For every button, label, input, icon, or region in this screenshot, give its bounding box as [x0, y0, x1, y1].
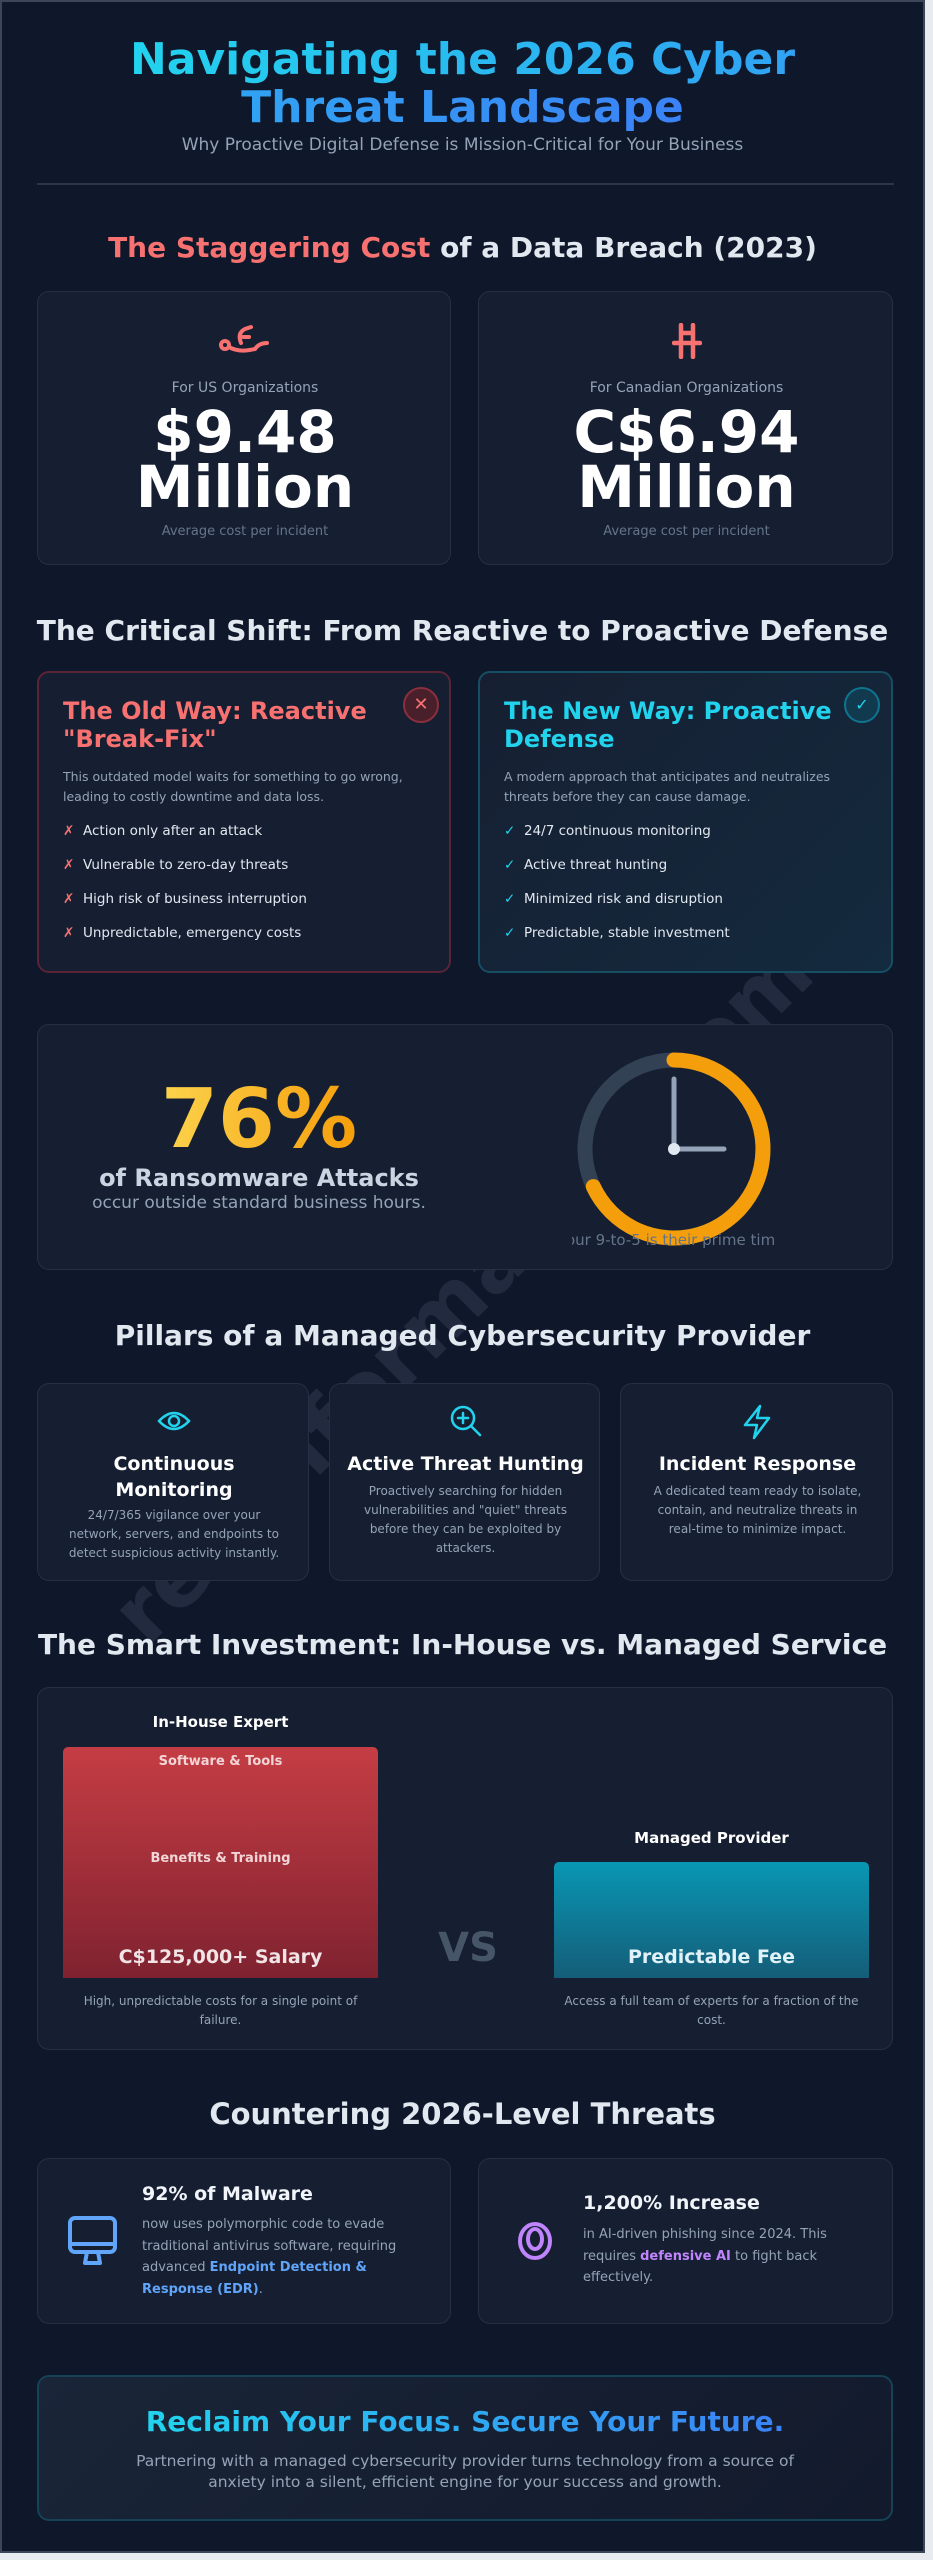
- panel: US cost: [37, 291, 451, 565]
- heading: old way: "Break-Fix": [63, 725, 217, 753]
- panel: malware: [37, 2158, 451, 2324]
- label: managed: Managed Provider: [634, 1829, 789, 1847]
- panel: Canada cost: Average cost per incident: [603, 524, 770, 539]
- heading: cost of breach: The Staggering Cost of a Data Breach (2023): [108, 231, 817, 264]
- icon: check circle: ✓: [855, 695, 869, 714]
- cta heading: Reclaim Your Focus. Secure Your Future.: [146, 2405, 784, 2438]
- list: old way: Unpredictable, emergency costs: [83, 925, 301, 941]
- panel: continuous monitoring: Monitoring: [115, 1479, 233, 1501]
- panel: continuous monitoring: Continuous: [113, 1453, 235, 1475]
- list: old way: [63, 823, 307, 941]
- heading: smart investment: The Smart Investment: In-House vs. Managed Service: [38, 1628, 887, 1661]
- panel: incident response: [620, 1383, 893, 1581]
- panel: old way: ✗: [63, 857, 74, 873]
- panel: incident response: Incident Response: [659, 1453, 856, 1475]
- panel: old way: ✗: [63, 891, 74, 907]
- list: new way: Minimized risk and disruption: [524, 891, 723, 907]
- icon: x circle: ✕: [413, 694, 429, 715]
- bar: in-house costs: Software & Tools: [159, 1754, 282, 1769]
- panel: old way: ✗: [63, 925, 74, 941]
- icon: search plus: [450, 1406, 482, 1436]
- panel: investment comparison: [37, 1687, 893, 2050]
- panel: AI phishing: [478, 2158, 893, 2324]
- stat: US: [136, 398, 354, 521]
- subtitle: Why Proactive Digital Defense is Mission-Critical for Your Business: [182, 135, 743, 155]
- heading: countering threats: Countering 2026-Level Threats: [209, 2097, 716, 2131]
- stat: Canada: Million: [577, 453, 796, 521]
- label: in-house: In-House Expert: [153, 1713, 288, 1731]
- bar: in-house costs: C$125,000+ Salary: [119, 1946, 322, 1968]
- bar: in-house costs: Benefits & Training: [150, 1851, 291, 1866]
- icon: US: [219, 325, 269, 353]
- panel: threat hunting: Proactively searching for hidden vulnerabilities and "quiet" threats before they can be exploited by attackers.: [364, 1484, 567, 1555]
- panel: old way: ✗: [63, 823, 74, 839]
- panel: new way: ✓: [504, 891, 515, 907]
- list: old way: High risk of business interruption: [83, 891, 307, 907]
- panel: US cost: For US Organizations: [172, 380, 318, 396]
- icon: check circle: [844, 687, 880, 723]
- title: Navigating the 2026 Cyber: [130, 34, 795, 85]
- bar: in-house costs: [63, 1747, 378, 1978]
- heading: critical shift: The Critical Shift: From Reactive to Proactive Defense: [37, 614, 888, 647]
- panel: continuous monitoring: [37, 1383, 309, 1581]
- panel: threat hunting: [329, 1383, 600, 1581]
- list: new way: Predictable, stable investment: [524, 925, 730, 941]
- panel: old way: This outdated model waits for something to go wrong, leading to costly downtime and data loss.: [63, 769, 403, 804]
- heading: old way: The Old Way: Reactive: [63, 697, 367, 725]
- panel: new way: ✓: [504, 823, 515, 839]
- list: old way: Action only after an attack: [83, 823, 262, 839]
- icon: Canada: [672, 323, 702, 359]
- list: new way: 24/7 continuous monitoring: [524, 823, 711, 839]
- title: Threat Landscape: [241, 82, 684, 133]
- bar: managed fee: Predictable Fee: [628, 1946, 795, 1968]
- panel: ransomware stat: [37, 1024, 893, 1270]
- panel: ransomware stat: occur outside standard business hours.: [92, 1193, 426, 1213]
- panel: call to action: Partnering with a managed cybersecurity provider turns technology from a source of anxiety into a silent, efficient engine for your success and growth.: [136, 2452, 794, 2491]
- title: [130, 34, 795, 133]
- stat: Canada: C$6.94: [573, 398, 800, 466]
- panel: old way: [37, 671, 451, 973]
- panel: AI phishing: 1,200% Increase: [583, 2192, 760, 2214]
- label: vs: VS: [438, 1925, 498, 1971]
- icon: eye: [157, 1412, 191, 1430]
- watermark: reisinformatica.com: [92, 922, 832, 1662]
- panel: Canada cost: [478, 291, 893, 565]
- panel: new way: [478, 671, 893, 973]
- icon: monitor: [68, 2216, 117, 2265]
- panel: new way: ✓: [504, 925, 515, 941]
- stat: US: $9.48: [153, 398, 337, 466]
- heading: old way: [63, 697, 367, 753]
- list: new way: [504, 823, 730, 941]
- panel: investment comparison: Access a full team of experts for a fraction of the cost.: [564, 1994, 859, 2027]
- icon: fingerprint: [518, 2222, 552, 2260]
- panel: ransomware stat: of Ransomware Attacks: [99, 1164, 419, 1192]
- stat: 76%: 76%: [161, 1072, 357, 1167]
- heading: new way: Defense: [504, 725, 615, 753]
- bar: managed fee: [554, 1862, 869, 1978]
- stat: Canada: [573, 398, 800, 521]
- panel: threat hunting: Active Threat Hunting: [347, 1453, 584, 1475]
- list: old way: Vulnerable to zero-day threats: [83, 857, 288, 873]
- panel: continuous monitoring: 24/7/365 vigilance over your network, servers, and endpoints to detect suspicious activity instantly.: [69, 1508, 279, 1560]
- chart: clock: [572, 1052, 776, 1249]
- panel: AI phishing: in AI-driven phishing since 2024. This requires defensive AI to fight back effectively.: [583, 2227, 827, 2285]
- panel: US cost: Average cost per incident: [162, 524, 328, 539]
- panel: call to action: [37, 2375, 893, 2521]
- heading: pillars: Pillars of a Managed Cybersecurity Provider: [115, 1319, 810, 1352]
- panel: investment comparison: High, unpredictable costs for a single point of failure.: [84, 1994, 357, 2027]
- heading: new way: The New Way: Proactive: [504, 697, 832, 725]
- panel: Canada cost: For Canadian Organizations: [590, 380, 783, 396]
- panel: new way: ✓: [504, 857, 515, 873]
- icon: lightning: [744, 1404, 770, 1440]
- stat: US: Million: [136, 453, 354, 521]
- panel: malware: 92% of Malware: [142, 2183, 313, 2205]
- panel: new way: A modern approach that anticipates and neutralizes threats before they can cause damage.: [504, 769, 830, 804]
- heading: new way: [504, 697, 832, 753]
- panel: malware: now uses polymorphic code to evade traditional antivirus software, requiring advanced Endpoint Detection & Response (EDR).: [142, 2217, 396, 2296]
- list: new way: Active threat hunting: [524, 857, 667, 873]
- icon: x circle: [403, 687, 439, 723]
- panel: incident response: A dedicated team ready to isolate, contain, and neutralize threats in real-time to minimize impact.: [654, 1484, 861, 1536]
